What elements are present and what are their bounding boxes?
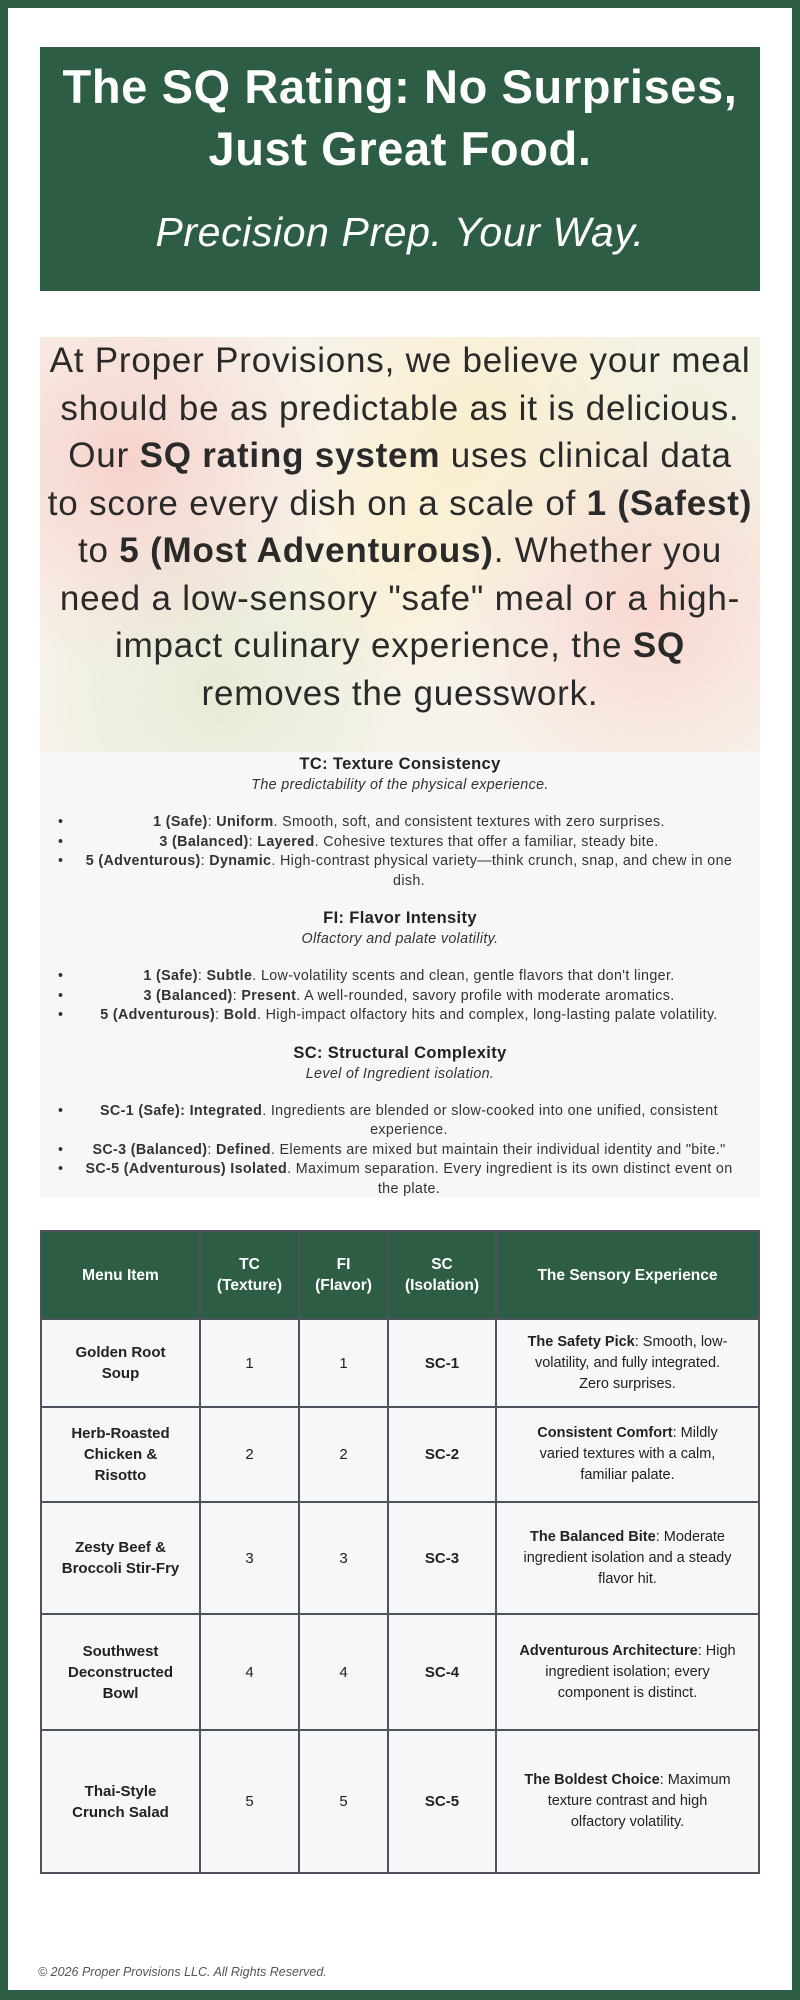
table: menu ratings: Golden Root xyxy=(76,1344,166,1361)
table: menu ratings: The Safety Pick: Smooth, low-volatility, and fully integrated. Zero surprises. xyxy=(528,1334,727,1392)
table: menu ratings: Deconstructed xyxy=(68,1664,173,1680)
table: menu ratings: Adventurous Architecture: High ingredient isolation; every component is distinct. xyxy=(519,1642,736,1700)
table: menu ratings: Zesty Beef & xyxy=(75,1539,166,1556)
table: menu ratings: 1 xyxy=(339,1354,348,1372)
intro text: At Proper Provisions, we believe your meal xyxy=(50,341,750,380)
table: menu ratings: The Sensory Experience xyxy=(537,1266,718,1284)
table: menu ratings: The Boldest Choice: Maximum texture contrast and high olfactory volatility. xyxy=(524,1772,731,1830)
table: menu ratings: Broccoli Stir-Fry xyxy=(62,1560,179,1577)
panel: definitions xyxy=(40,752,760,1197)
title: The SQ Rating: No Surprises, xyxy=(63,60,737,113)
list: TC: 5 (Adventurous): Dynamic. High-contrast physical variety—think crunch, snap, and chew in one dish. xyxy=(86,853,732,888)
intro text: should be as predictable as it is delicious. xyxy=(60,388,740,428)
table: menu ratings: 4 xyxy=(245,1664,254,1680)
list: SC: SC-3 (Balanced): Defined. Elements are mixed but maintain their individual identity and "bite." xyxy=(92,1142,726,1158)
panel: definitions: The predictability of the physical experience. xyxy=(251,777,549,793)
table: menu ratings: (Texture) xyxy=(217,1277,282,1294)
title xyxy=(63,60,737,175)
table: menu ratings: Consistent Comfort: Mildly varied textures with a calm, familiar palate. xyxy=(537,1425,718,1483)
intro text xyxy=(48,341,752,712)
table: menu ratings: SC-4 xyxy=(425,1664,459,1680)
table: menu ratings: Southwest xyxy=(83,1642,158,1660)
table: menu ratings: SC-5 xyxy=(425,1793,459,1810)
table: menu ratings: 3 xyxy=(339,1550,348,1566)
table: menu ratings: Thai-Style xyxy=(85,1782,156,1800)
intro text: impact culinary experience, the SQ xyxy=(115,626,685,665)
table: menu ratings: Risotto xyxy=(95,1467,146,1484)
table: menu ratings: Crunch Salad xyxy=(72,1804,169,1820)
intro text: need a low-sensory "safe" meal or a high- xyxy=(60,578,740,618)
title: Just Great Food. xyxy=(208,122,592,175)
table: menu ratings: 2 xyxy=(245,1446,254,1463)
table: menu ratings: SC-2 xyxy=(425,1446,459,1463)
header banner xyxy=(40,47,760,291)
footer: © 2026 Proper Provisions LLC. All Rights Reserved. xyxy=(38,1965,327,1979)
table: menu ratings: 2 xyxy=(339,1446,348,1463)
table: menu ratings: Soup xyxy=(102,1365,139,1382)
table: menu ratings: 5 xyxy=(245,1793,254,1810)
intro text: Our SQ rating system uses clinical data xyxy=(68,436,732,475)
table: menu ratings: 5 xyxy=(339,1793,348,1810)
table: menu ratings: (Flavor) xyxy=(315,1277,372,1294)
table: menu ratings: (Isolation) xyxy=(405,1277,479,1294)
heading: SC: SC: Structural Complexity xyxy=(293,1044,507,1062)
panel: definitions: Level of Ingredient isolation. xyxy=(306,1066,494,1082)
table: menu ratings xyxy=(40,1230,760,1874)
table: menu ratings: FI xyxy=(337,1256,350,1273)
list: SC: SC-5 (Adventurous) Isolated. Maximum separation. Every ingredient is its own distinct event on the plate. xyxy=(85,1161,733,1196)
list: TC: 1 (Safe): Uniform. Smooth, soft, and consistent textures with zero surprises. xyxy=(153,814,665,830)
list: FI: 3 (Balanced): Present. A well-rounded, savory profile with moderate aromatics. xyxy=(143,988,675,1004)
table: menu ratings: TC xyxy=(239,1256,260,1273)
table: menu ratings: SC-3 xyxy=(425,1550,459,1566)
list: TC xyxy=(58,814,732,888)
intro panel with food background xyxy=(40,337,760,752)
table: menu ratings: 4 xyxy=(339,1664,348,1680)
table: menu ratings: Herb-Roasted xyxy=(71,1425,170,1442)
list: TC: 3 (Balanced): Layered. Cohesive textures that offer a familiar, steady bite. xyxy=(159,834,659,850)
list: SC xyxy=(58,1102,733,1196)
table: menu ratings: SC-1 xyxy=(425,1354,459,1372)
table: menu ratings: Chicken & xyxy=(84,1446,157,1463)
intro text: to score every dish on a scale of 1 (Safest) xyxy=(48,484,752,522)
list: SC: SC-1 (Safe): Integrated. Ingredients are blended or slow-cooked into one unified, consistent experience. xyxy=(100,1102,718,1138)
subtitle: Precision Prep. Your Way. xyxy=(155,209,644,255)
table: menu ratings: 3 xyxy=(245,1550,254,1566)
table: menu ratings: The Balanced Bite: Moderate ingredient isolation and a steady flavor hit. xyxy=(524,1528,731,1586)
list: FI xyxy=(58,968,718,1023)
table: menu ratings: Bowl xyxy=(103,1684,138,1702)
list: FI: 1 (Safe): Subtle. Low-volatility scents and clean, gentle flavors that don't linger. xyxy=(143,968,675,984)
list: FI: 5 (Adventurous): Bold. High-impact olfactory hits and complex, long-lasting palate volatility. xyxy=(100,1007,718,1023)
intro text: to 5 (Most Adventurous). Whether you xyxy=(78,531,722,570)
table: menu ratings: 1 xyxy=(245,1354,254,1372)
table: menu ratings: SC xyxy=(431,1256,453,1273)
heading: TC: TC: Texture Consistency xyxy=(299,755,501,773)
heading: FI: FI: Flavor Intensity xyxy=(323,909,477,927)
table: menu ratings: Menu Item xyxy=(82,1266,159,1284)
intro text: removes the guesswork. xyxy=(202,674,598,712)
panel: definitions: Olfactory and palate volatility. xyxy=(302,931,498,947)
